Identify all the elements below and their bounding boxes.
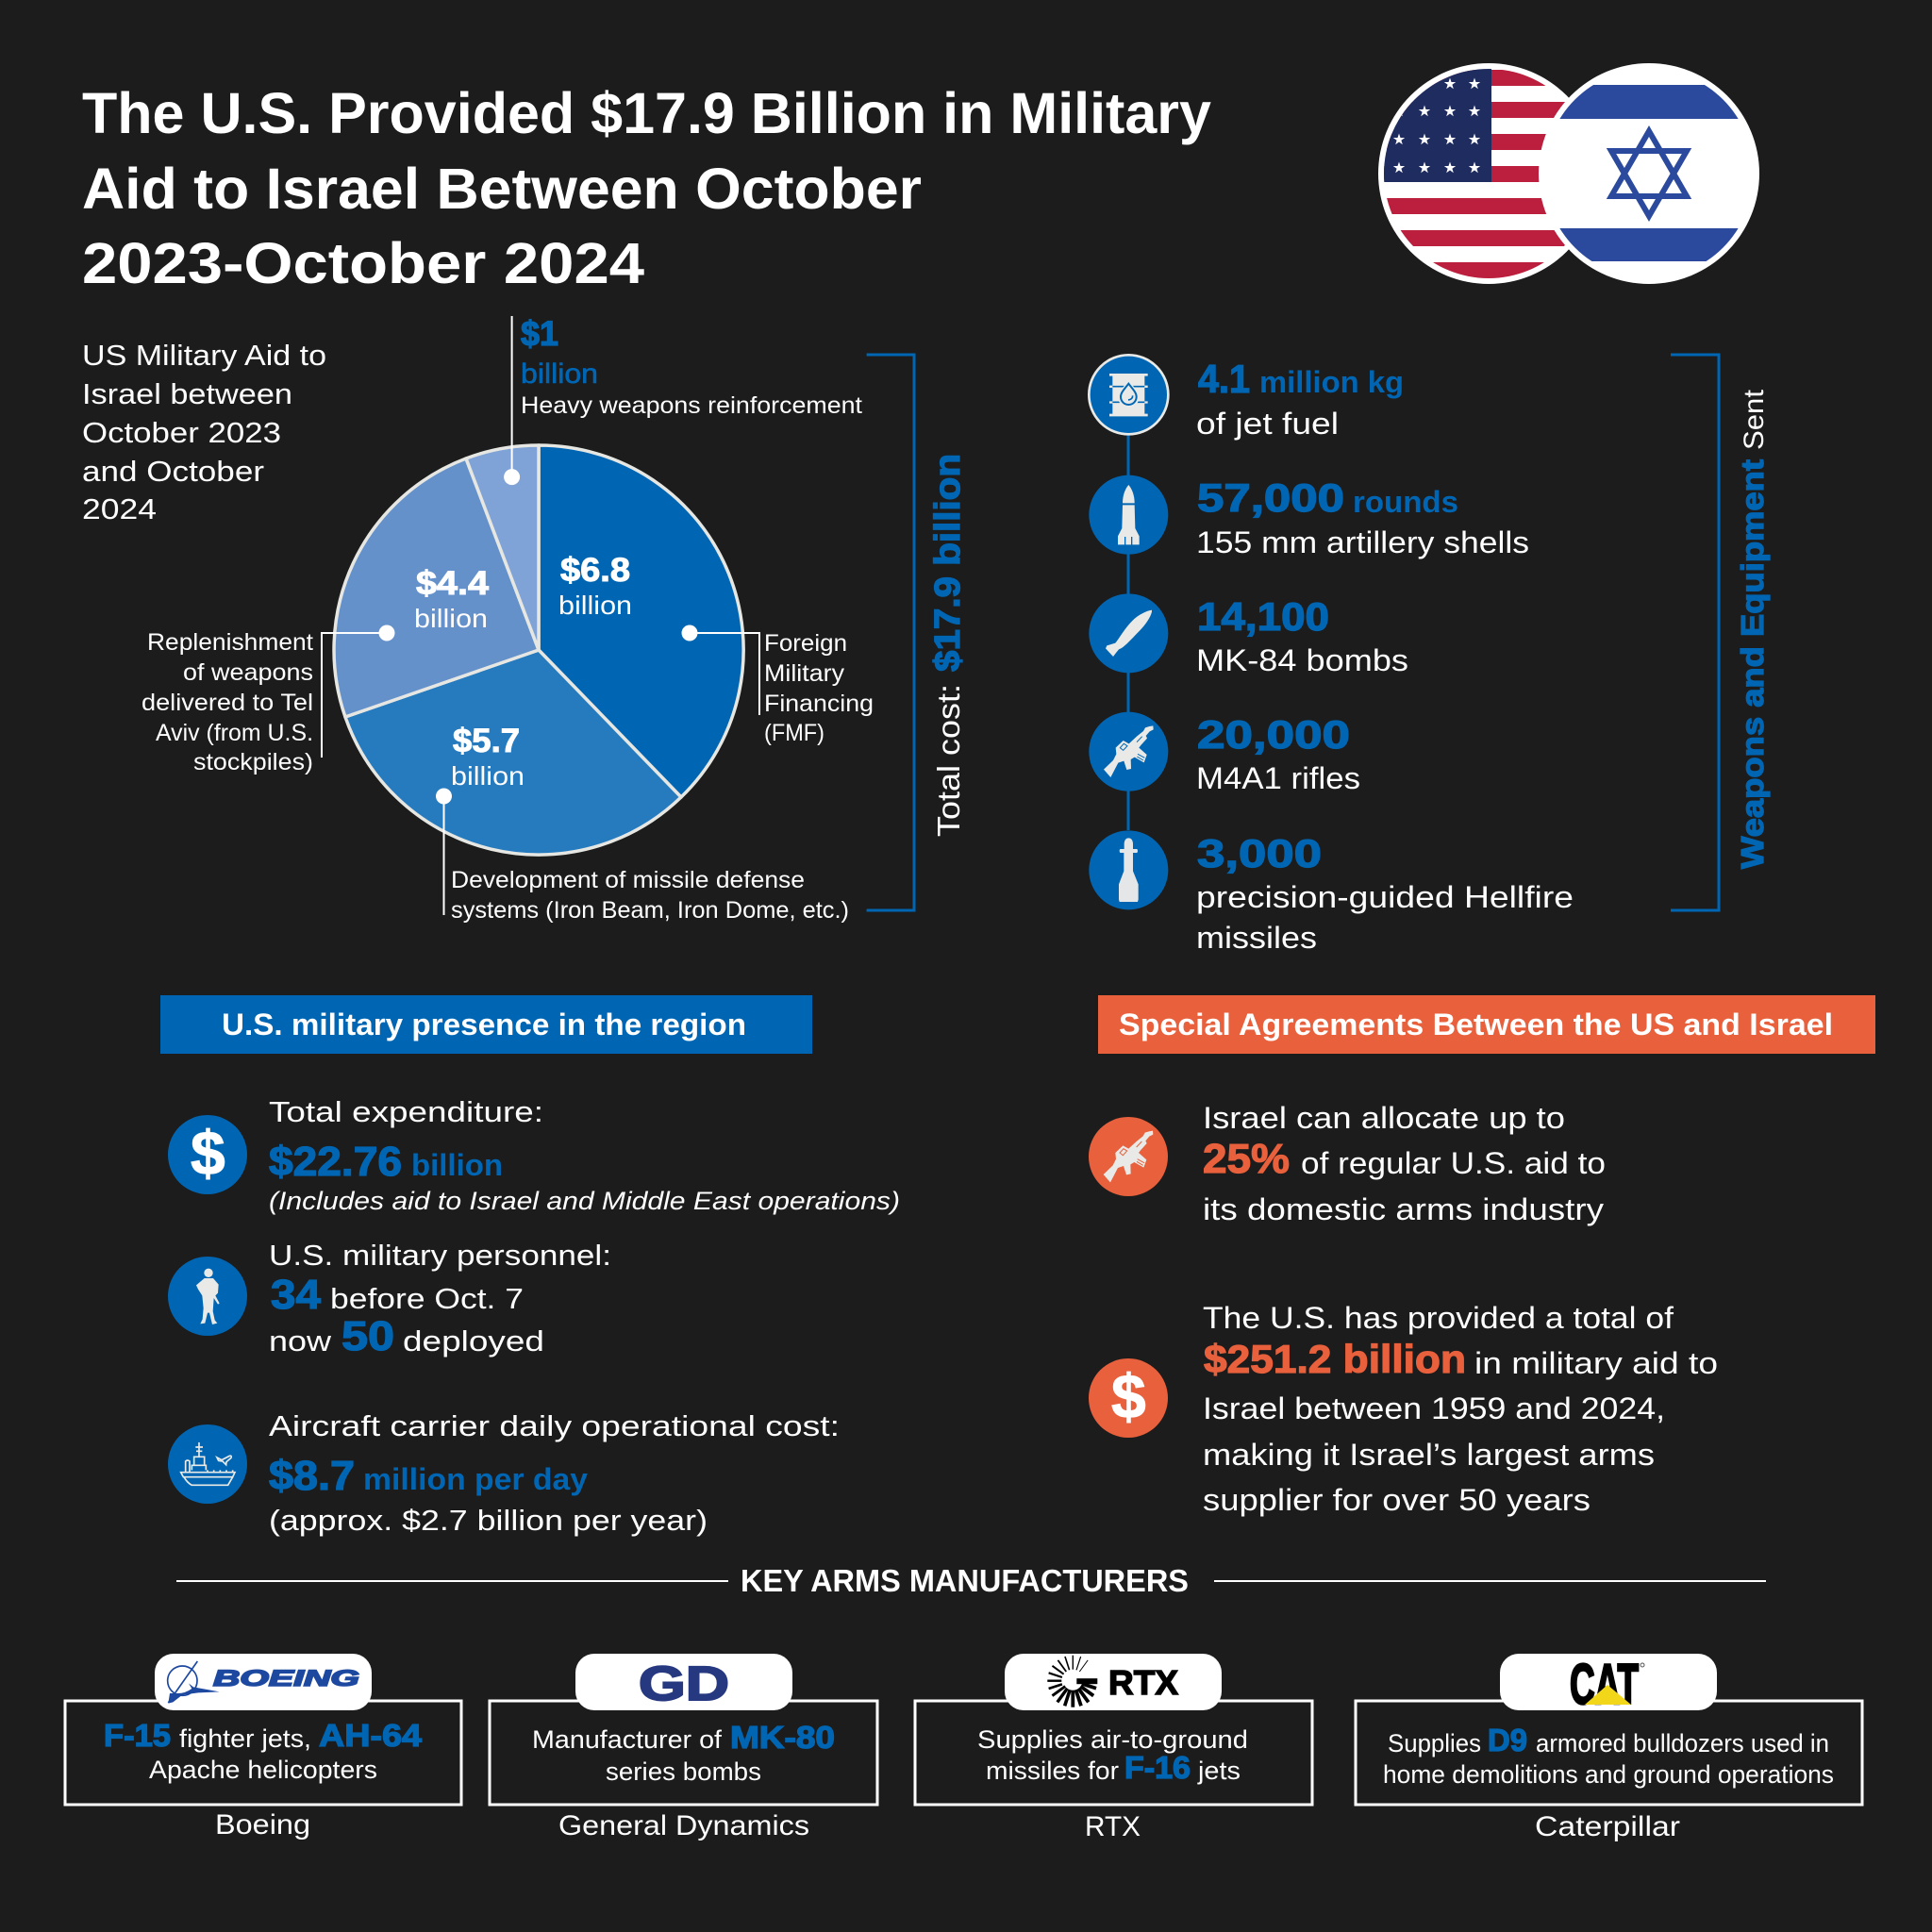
text block: total expenditure: Total expenditure: [269,1095,543,1128]
text block: military personnel: deployed [403,1324,544,1357]
heading: U.S. military presence [160,995,812,1054]
logo: CAT: CAT [1570,1653,1639,1716]
card: RTX: jets [1197,1757,1241,1785]
callout: Foreign Military Financing: (FMF) [764,720,824,746]
text block: total expenditure: (Includes aid to Israel and Middle East operations) [269,1187,900,1215]
bracket: total cost [867,355,914,910]
card: Caterpillar: Caterpillar [1535,1811,1680,1842]
heading: key arms manufacturers: KEY ARMS MANUFACTURERS [741,1563,1189,1598]
stat: artillery shells: 57,000 [1197,475,1344,520]
stat: jet fuel: of jet fuel [1196,407,1339,441]
title: Aid to Israel Between October [82,157,922,221]
text block: domestic arms industry [1203,1101,1606,1226]
text block: aircraft carrier cost [269,1409,840,1537]
card: Boeing: fighter jets, [179,1724,311,1753]
heading: U.S. military presence: U.S. military presence in the region [222,1008,746,1041]
pie value labels: $6.8 [560,552,630,589]
callout: Foreign Military Financing: Military [764,660,845,687]
icon: M4A1 rifle [1089,712,1168,791]
text block: total expenditure [269,1095,900,1215]
text block: total military aid: Israel between 1959 and 2024, [1203,1391,1665,1425]
icon: orange rifle [1089,1117,1168,1196]
icon: aircraft carrier [168,1424,247,1504]
card: Boeing: AH-64 [319,1718,423,1753]
stat: artillery shells: 155 mm artillery shells [1196,525,1529,559]
callout: Replenishment of weapons: of weapons [183,659,313,686]
card: RTX: RTX [1085,1811,1141,1842]
stat: Hellfire missiles: precision-guided Hellfire [1196,880,1574,914]
text block: military personnel: 50 [341,1313,394,1359]
icon: orange dollar: $ [1111,1361,1146,1431]
text block: domestic arms industry: 25% [1203,1136,1290,1182]
text block: pie chart intro: US Military Aid to [82,339,326,372]
stat: jet fuel: million kg [1259,365,1404,399]
callout: Development of missile defense: Development of missile defense [451,867,805,893]
text block: total military aid: supplier for over 50 years [1203,1483,1591,1517]
callout: $1 billion heavy weapons: billion [521,358,598,390]
text block: military personnel: 34 [271,1272,322,1318]
timeline connector [1126,434,1130,830]
stat: MK-84 bombs: 14,100 [1197,594,1329,639]
stat: MK-84 bombs: MK-84 bombs [1196,643,1408,677]
title: 2023-October 2024 [82,231,644,295]
pie value labels [414,552,632,791]
card: Caterpillar: Supplies [1388,1729,1481,1757]
card: Caterpillar: D9 [1488,1723,1527,1757]
card: Boeing: Boeing [215,1809,310,1840]
callout: Replenishment of weapons: Replenishment [147,629,313,656]
stat: Hellfire missiles [1196,831,1574,955]
callout: Foreign Military Financing: Foreign [764,630,847,657]
title [82,81,1211,295]
stat: artillery shells: rounds [1353,485,1458,519]
text block: military personnel: U.S. military personnel: [269,1239,611,1272]
logo: CAT [1500,1653,1717,1716]
icon: artillery shell [1089,475,1168,555]
text block: pie chart intro [82,339,326,525]
text block: military personnel [269,1239,611,1359]
card: RTX [915,1654,1312,1842]
callout: Development of missile defense: systems (Iron Beam, Iron Dome, etc.) [451,897,849,924]
text block: total military aid: The U.S. has provided a total of [1203,1301,1674,1335]
icon: orange dollar [1089,1358,1168,1438]
callout: $1 billion heavy weapons [521,314,862,419]
callout: $1 billion heavy weapons: Heavy weapons reinforcement [521,392,862,419]
text block: pie chart intro: 2024 [82,492,157,525]
heading: special agreements [1098,995,1875,1054]
card: General Dynamics: General Dynamics [558,1810,809,1841]
text block: total military aid: in military aid to [1474,1346,1718,1380]
callout: $1 billion heavy weapons: $1 [521,314,558,353]
callout: Replenishment of weapons: stockpiles) [193,749,313,775]
text block: pie chart intro: and October [82,455,264,488]
stat: jet fuel: 4.1 [1198,357,1250,401]
card: Boeing: F-15 [104,1718,171,1753]
icon: jet fuel barrel [1089,355,1168,434]
text block: total military aid [1203,1301,1718,1517]
card: Boeing [65,1654,461,1840]
text block: aircraft carrier cost: (approx. $2.7 billion per year) [269,1504,708,1537]
stat: M4A1 rifles: M4A1 rifles [1196,761,1360,795]
card: Caterpillar: armored bulldozers used in [1536,1729,1829,1757]
pie value labels: $5.7 [453,723,520,759]
card: General Dynamics: Manufacturer of [532,1725,723,1754]
title: The U.S. Provided $17.9 Billion in Military [82,81,1211,145]
callout: Foreign Military Financing: Financing [764,691,874,717]
text block: aircraft carrier cost: $8.7 [269,1453,355,1499]
text block: domestic arms industry: Israel can allocate up to [1203,1101,1565,1135]
pie value labels: $4.4 [416,565,490,602]
logo: GD [575,1654,792,1710]
card: RTX: F-16 [1124,1750,1191,1785]
text block: military personnel: now [269,1324,332,1357]
logo: Boeing [155,1654,372,1710]
text block: military personnel: before Oct. 7 [330,1282,524,1315]
card: RTX: missiles for [986,1757,1119,1785]
callout: Replenishment of weapons: Aviv (from U.S. [156,720,313,746]
text block: domestic arms industry: its domestic arms industry [1203,1192,1604,1226]
pie value labels: billion [451,761,525,791]
label: total cost [928,454,968,837]
text block: pie chart intro: Israel between [82,377,292,410]
stat: MK-84 bombs [1196,594,1408,677]
pie value labels: billion [414,604,488,633]
card: General Dynamics [490,1654,877,1841]
logo: RTX [1005,1654,1222,1710]
card: Caterpillar [1356,1653,1862,1842]
card: General Dynamics: series bombs [606,1757,761,1786]
label: weapons and equipment sent: Sent [1739,389,1770,450]
text block: aircraft carrier cost: million per day [363,1462,588,1496]
heading: special agreements: Special Agreements Between the US and Israel [1119,1008,1833,1041]
pie value labels: billion [558,591,632,620]
logo: GD: GD [639,1657,729,1710]
card: Caterpillar: home demolitions and ground operations [1383,1760,1834,1789]
text block: domestic arms industry: of regular U.S. aid to [1301,1146,1606,1180]
pie leader lines and dots [322,316,759,915]
logo: Boeing: BOEING [213,1666,359,1691]
stat: Hellfire missiles: missiles [1196,921,1317,955]
icon: MK-84 bomb [1089,593,1168,673]
text block: pie chart intro: October 2023 [82,416,281,449]
icon: soldier [168,1257,247,1336]
stat: artillery shells [1196,475,1529,559]
icon: dollar [168,1115,247,1194]
text block: total expenditure: billion [411,1148,503,1182]
stat: M4A1 rifles: 20,000 [1197,712,1350,757]
logo: RTX: RTX [1108,1663,1178,1702]
icon: Hellfire missile [1089,830,1168,909]
bracket: weapons sent [1671,355,1719,910]
icon: US and Israel flags [1377,63,1764,284]
card: RTX: Supplies air-to-ground [977,1725,1248,1754]
stat: jet fuel [1196,357,1404,441]
icon: dollar: $ [191,1118,225,1188]
stat: Hellfire missiles: 3,000 [1197,831,1322,875]
label: total cost: Total cost: [931,684,966,837]
card: General Dynamics: MK-80 [730,1720,835,1755]
callout: Replenishment of weapons: delivered to Tel [142,690,313,716]
text block: total expenditure: $22.76 [269,1139,402,1185]
label: weapons and equipment sent: Weapons and Equipment [1735,459,1770,869]
text block: aircraft carrier cost: Aircraft carrier daily operational cost: [269,1409,840,1442]
callout: Replenishment of weapons [142,629,313,775]
label: total cost: $17.9 billion [928,454,968,672]
stat: M4A1 rifles [1196,712,1360,795]
text block: total military aid: making it Israel’s largest arms [1203,1438,1655,1472]
callout: Foreign Military Financing [764,630,874,746]
text block: total military aid: $251.2 billion [1204,1337,1466,1381]
card: Boeing: Apache helicopters [149,1756,377,1784]
callout: Development of missile defense [451,867,849,924]
pie chart [334,445,743,855]
